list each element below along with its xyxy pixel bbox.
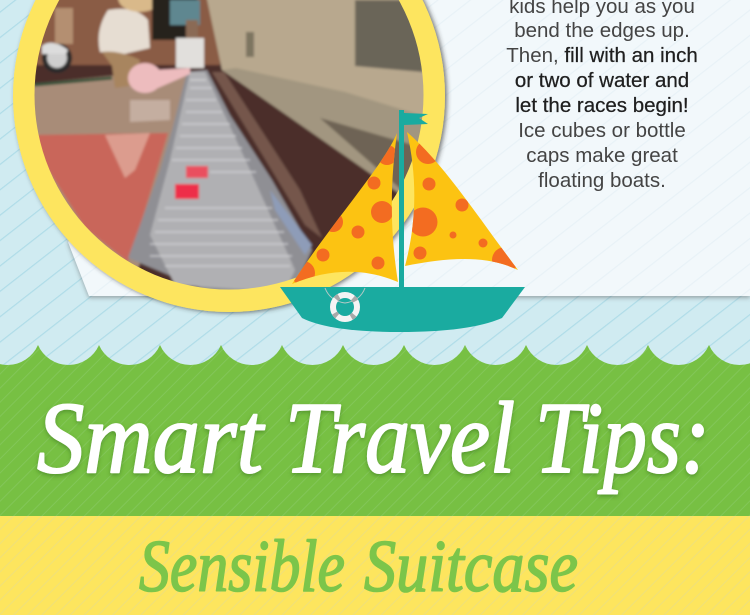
subtitle xyxy=(139,526,578,608)
subtitle: Sensible xyxy=(139,526,345,608)
right sail xyxy=(405,132,518,273)
scooter wheel xyxy=(42,43,72,73)
plastic water channel xyxy=(128,70,312,292)
instruction text block: floating boats. xyxy=(538,169,666,192)
life ring rope xyxy=(325,288,365,303)
yellow photo ring xyxy=(13,0,445,312)
mast and flag xyxy=(399,110,428,290)
instruction text block: Ice cubes or bottle xyxy=(518,119,686,142)
pink watering can xyxy=(128,63,162,93)
louvred window xyxy=(355,0,423,72)
title xyxy=(37,382,710,495)
subtitle: Suitcase xyxy=(364,526,578,608)
yellow subtitle band xyxy=(0,516,750,615)
concrete ground xyxy=(34,74,187,268)
photo base xyxy=(34,61,398,288)
instruction text block: caps make great xyxy=(526,144,678,167)
sky background xyxy=(0,0,750,370)
instruction text block: bend the edges up. xyxy=(514,19,690,42)
instruction text block: or two of water and xyxy=(515,69,689,92)
wet channel edge xyxy=(212,72,322,238)
title: Travel xyxy=(285,382,515,495)
life ring xyxy=(328,290,362,324)
instruction text block: Then, fill with an inch xyxy=(506,44,698,67)
red stained patch xyxy=(30,133,168,262)
instruction text block xyxy=(506,0,698,192)
green title band with scalloped edge xyxy=(0,345,750,615)
back wall xyxy=(20,0,220,65)
title: Smart xyxy=(37,382,265,495)
title: Tips: xyxy=(535,382,710,495)
photo: children racing boats in a plastic water channel xyxy=(34,0,424,290)
hull xyxy=(280,287,525,332)
red floating boats xyxy=(186,166,208,178)
left sail xyxy=(291,133,398,285)
small window xyxy=(246,32,254,57)
second child xyxy=(152,0,197,40)
icon: sailboat xyxy=(280,110,525,332)
crouching child xyxy=(99,9,150,55)
garden hose xyxy=(34,78,112,85)
instruction text block: let the races begin! xyxy=(515,94,689,117)
panel: white instruction card xyxy=(68,0,750,296)
side building wall xyxy=(206,0,424,114)
